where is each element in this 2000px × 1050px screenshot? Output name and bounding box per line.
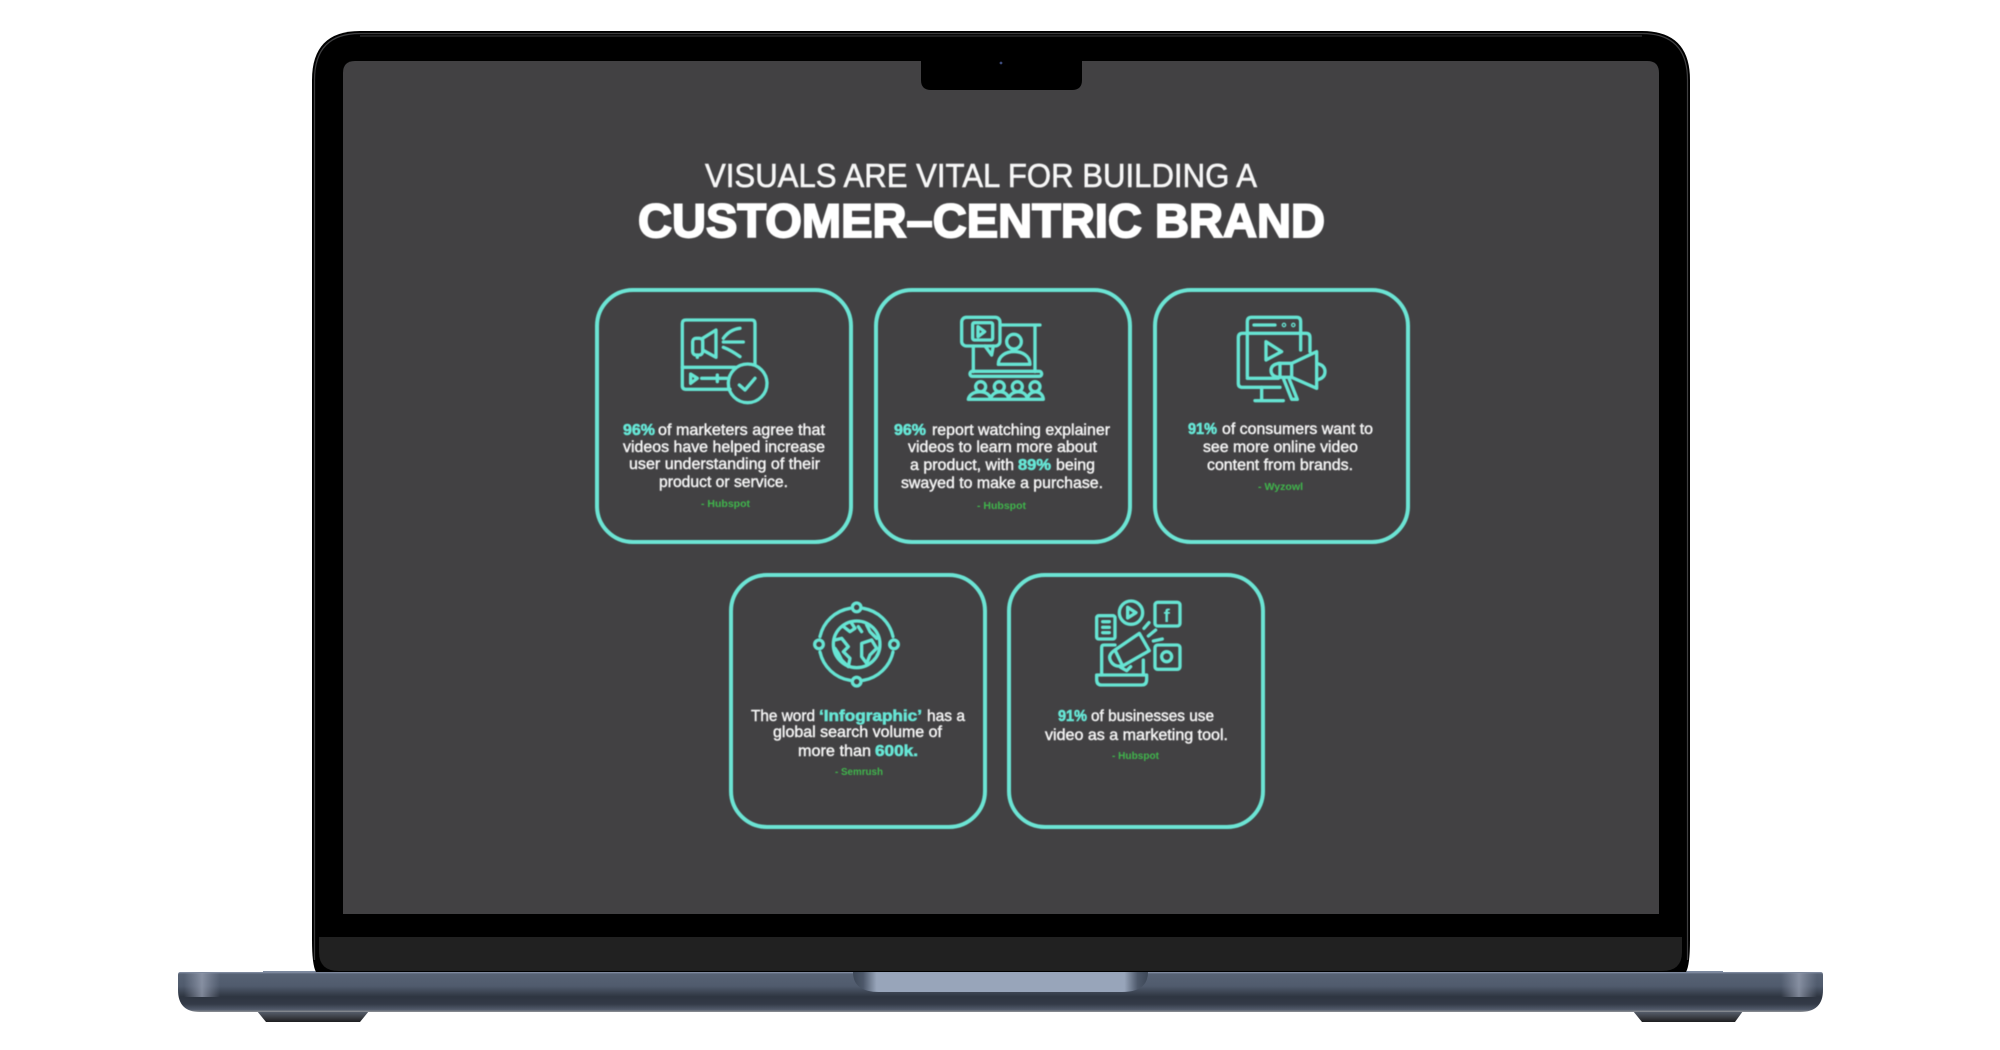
stat text: swayed to make a purchase. bbox=[901, 475, 1103, 492]
stat text: The word bbox=[751, 708, 815, 725]
source: - Wyzowl bbox=[1258, 482, 1303, 493]
source: - Semrush bbox=[835, 767, 883, 778]
panel: explainer videos stat bbox=[876, 290, 1130, 542]
stat text bbox=[1045, 708, 1228, 744]
stat text: 91% bbox=[1188, 421, 1217, 438]
stat text: of marketers agree that bbox=[658, 422, 826, 439]
stat text: content from brands. bbox=[1207, 457, 1353, 474]
icon: laptop with megaphone and social media bbox=[1097, 601, 1180, 685]
stat text: more than bbox=[798, 743, 871, 760]
laptop feet bbox=[257, 1011, 1743, 1022]
laptop base bbox=[178, 971, 1823, 1012]
stat text: ‘Infographic’ bbox=[819, 708, 922, 725]
laptop lid bbox=[312, 31, 1690, 972]
icon: presenter on screen with audience bbox=[962, 317, 1043, 399]
stat text: a product, with bbox=[910, 457, 1014, 474]
title line 1: VISUALS ARE VITAL FOR BUILDING A bbox=[705, 157, 1257, 194]
stat text: videos have helped increase bbox=[623, 439, 825, 456]
icon: globe with orbit bbox=[815, 603, 898, 686]
stat text bbox=[1188, 421, 1373, 474]
lower bezel bbox=[319, 937, 1682, 971]
stat text: of businesses use bbox=[1091, 708, 1214, 725]
stat text: global search volume of bbox=[773, 724, 943, 741]
infographic content bbox=[597, 157, 1408, 827]
icon: laptop with megaphone and social media: f bbox=[1164, 605, 1171, 626]
source: - Hubspot bbox=[701, 499, 751, 510]
stat text: product or service. bbox=[659, 474, 788, 491]
panel: consumers stat bbox=[1155, 290, 1408, 542]
panel: infographic search volume bbox=[731, 575, 985, 827]
icon: browser video on monitor with megaphone bbox=[1238, 317, 1325, 401]
stat text: report watching explainer bbox=[932, 422, 1111, 439]
stat text: 96% bbox=[623, 422, 655, 439]
stat text: of consumers want to bbox=[1222, 421, 1373, 438]
stat text bbox=[623, 422, 826, 491]
stat text: user understanding of their bbox=[629, 456, 821, 473]
source: - Hubspot bbox=[977, 501, 1027, 512]
stat text: 91% bbox=[1058, 708, 1087, 725]
panel: marketers stat bbox=[597, 290, 851, 542]
title line 2: CUSTOMER–CENTRIC BRAND bbox=[638, 194, 1325, 247]
screen bbox=[343, 61, 1659, 914]
stat text: being bbox=[1056, 457, 1095, 474]
stat text: see more online video bbox=[1203, 439, 1358, 456]
stat text: 96% bbox=[894, 422, 926, 439]
panel: businesses stat bbox=[1009, 575, 1263, 827]
source: - Hubspot bbox=[1112, 751, 1160, 762]
stat text bbox=[894, 422, 1111, 492]
stat text: 600k. bbox=[875, 743, 918, 760]
stat text: video as a marketing tool. bbox=[1045, 727, 1228, 744]
camera notch bbox=[921, 60, 1082, 90]
icon: video player with megaphone and check bbox=[682, 320, 767, 403]
stat text: videos to learn more about bbox=[908, 439, 1098, 456]
stat text: has a bbox=[927, 708, 965, 725]
title bbox=[638, 157, 1325, 247]
stat text bbox=[751, 708, 965, 760]
stat text: 89% bbox=[1018, 457, 1051, 474]
